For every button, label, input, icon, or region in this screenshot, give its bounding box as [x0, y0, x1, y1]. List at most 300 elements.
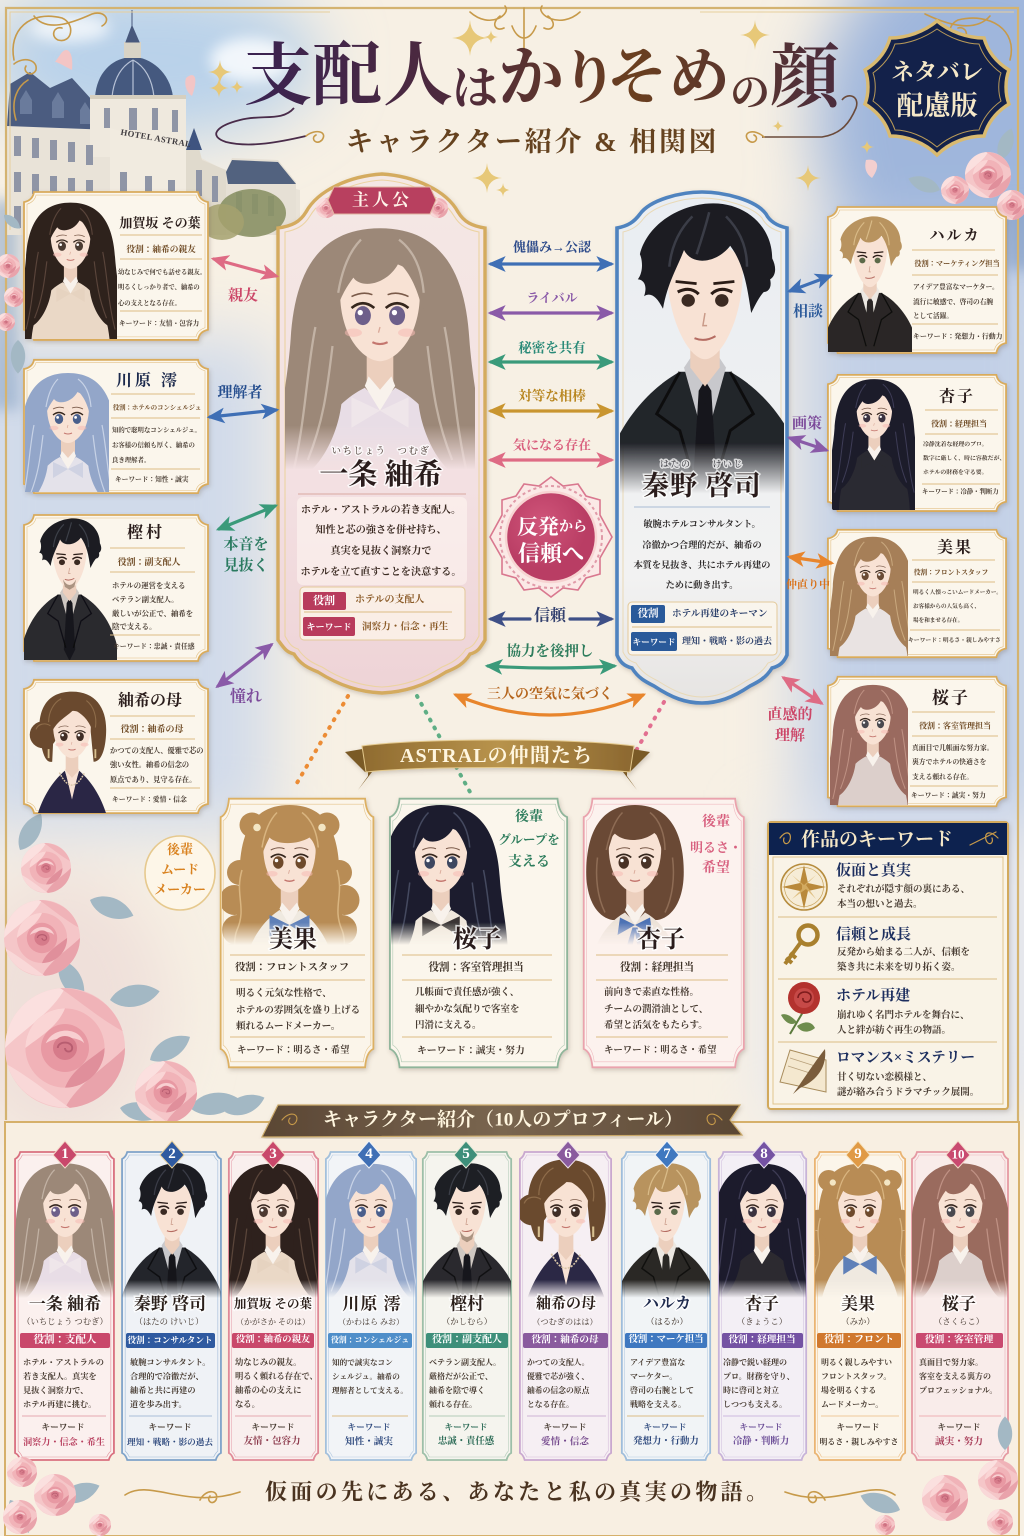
portrait [586, 805, 684, 944]
subtitle: キャラクター紹介 & 相関図 [346, 127, 719, 157]
hero name: 秦野 啓司 [642, 471, 762, 501]
role: 役割：経理担当 [620, 960, 694, 974]
keywords: キーワード [740, 1422, 782, 1432]
description: アイデア豊富なマーケター。 [913, 282, 999, 290]
number badge [946, 1141, 970, 1168]
icon: rose [781, 982, 820, 1034]
description: 場を和ませる存在。 [913, 616, 963, 624]
relation arrow: 仲直り中: 仲直り中 [786, 577, 830, 591]
profile card 7: ハルカ [620, 1140, 712, 1461]
number badge: 3 [269, 1146, 277, 1162]
role: 役割：フロントスタッフ [235, 960, 349, 974]
panel: profile section background [5, 1122, 1019, 1536]
keywords: キーワード [938, 1422, 980, 1432]
portrait [23, 518, 117, 664]
dotted connector: green [417, 696, 470, 792]
hero description: 冷徹かつ合理的だが、紬希の [642, 539, 762, 550]
name: ハルカ [643, 1296, 691, 1312]
reading: （つむぎのはは） [532, 1318, 598, 1326]
name: 美果 [937, 538, 973, 556]
portrait [912, 1163, 1008, 1297]
side note: 支える [508, 852, 550, 870]
reading: （さくらこ） [934, 1318, 984, 1326]
center arrow: 対等な相棒 [491, 388, 611, 411]
number badge [53, 1141, 77, 1168]
reading: （かがさか そのは） [236, 1318, 310, 1326]
rose garden: bottom left [3, 1457, 111, 1536]
heroine portrait [285, 228, 475, 466]
keywords: キーワード [149, 1422, 191, 1432]
name: 加賀坂 その葉 [234, 1296, 313, 1311]
description: 冷静で鋭い経理の [723, 1356, 787, 1366]
portrait [122, 1163, 221, 1298]
role: 役割：経理担当 [931, 418, 987, 428]
panel: hero [614, 190, 792, 708]
number badge: 10 [952, 1146, 964, 1162]
keywords [23, 1422, 105, 1447]
keywords: 明るさ・親しみやすさ [820, 1436, 898, 1446]
hotel building illustration [7, 10, 300, 240]
keywords: キーワード：友情・包容力 [119, 318, 200, 328]
staff card: 美果 [218, 799, 373, 1067]
keywords [633, 1422, 699, 1447]
description: 合理的で冷徹だが、 [130, 1370, 204, 1380]
keyword panel heading: 作品のキーワード [801, 828, 953, 850]
keywords: キーワード：知性・誠実 [115, 474, 189, 484]
heroine name: いちじょう つむぎ [331, 446, 431, 457]
icon: key [785, 926, 818, 964]
role: 役割：紬希の母 [120, 723, 184, 734]
text: 仮面と真実: 仮面と真実 [836, 861, 911, 879]
role: 役割：フロントスタッフ [914, 568, 988, 576]
rose garden: lower left [4, 809, 268, 1124]
hero role and keywords: キーワード [633, 637, 675, 647]
heroine description: ホテルを立て直すことを決意する。 [300, 564, 462, 578]
description: 道を歩み出す。 [130, 1398, 187, 1408]
keywords [935, 1422, 983, 1448]
description: しつつも支える。 [723, 1398, 787, 1408]
relation arrow: 直感的理解 [767, 678, 821, 744]
portrait [423, 1163, 511, 1297]
rose cluster: top right [906, 126, 1024, 220]
description: となる存在。 [527, 1398, 574, 1408]
number badge: 2 [168, 1146, 176, 1162]
center arrow: 気になる存在: 気になる存在 [513, 438, 591, 452]
role pill: 役割：マーケ担当 [628, 1333, 704, 1345]
relation arrow: 本音を見抜く [219, 506, 275, 574]
profile card 6: 紬希の母 [517, 1141, 612, 1460]
description: プロ。財務を守り、 [723, 1370, 795, 1380]
portrait [827, 216, 912, 356]
portrait [222, 805, 360, 944]
keywords [541, 1422, 590, 1448]
footer tagline: 仮面の先にある、あなたと私の真実の物語。 [265, 1480, 768, 1504]
keywords: 友情・包容力 [243, 1435, 301, 1447]
rose garden: bottom right [857, 1416, 1018, 1535]
banner: ASTRALの仲間たち: ASTRALの仲間たち [400, 744, 592, 767]
spoiler badge: ネタバレ [891, 60, 983, 84]
description: 紬希の心の支えに [235, 1384, 301, 1394]
medallion: 反発から信頼へ: 信頼へ [518, 540, 584, 566]
role pill [232, 1333, 314, 1348]
card: 桜子 (right) [827, 677, 1006, 823]
name: 杏子 [637, 926, 685, 953]
description: 知的で誠実なコン [332, 1356, 393, 1366]
heroine role and keywords: ホテルの支配人 [355, 592, 424, 606]
heroine role and keywords: キーワード [306, 622, 352, 632]
reading: （はたの けいじ） [134, 1318, 204, 1326]
keywords: 理知・戦略・影の過去 [127, 1436, 213, 1447]
portrait [24, 202, 117, 343]
role pill [817, 1332, 901, 1348]
name: 樫村 [127, 522, 165, 542]
description: 知的で聡明なコンシェルジュ。 [112, 424, 201, 434]
hero role and keywords: ホテル再建のキーマン [672, 608, 768, 620]
name: 紬希の母 [118, 690, 182, 710]
number badge [556, 1141, 580, 1168]
keywords [345, 1422, 393, 1448]
side note: 後輩 [702, 812, 730, 830]
keywords: キーワード：明るさ・希望 [604, 1044, 717, 1056]
keywords: 愛情・信念 [541, 1436, 590, 1448]
profile card 4: 川原 澪 [325, 1140, 417, 1461]
center arrow: 気になる存在 [491, 438, 611, 460]
heroine description: 真実を見抜く洞察力で [331, 544, 431, 556]
description: シェルジュ。紬希の [332, 1370, 400, 1380]
relation arrow: 画策: 画策 [792, 414, 822, 432]
hero role and keywords: 理知・戦略・影の過去 [682, 635, 773, 646]
description: フロントスタッフ。 [821, 1372, 891, 1380]
icon: compass [781, 864, 827, 910]
title: り [560, 46, 618, 110]
hotel sign: HOTEL ASTRAL [120, 127, 192, 149]
name: 一条 紬希 [29, 1294, 101, 1314]
medallion: 反発から信頼へ: 反発から [517, 515, 587, 539]
text: ロマンス×ミステリー [836, 1050, 979, 1098]
description: 戦略を支える。 [630, 1398, 686, 1408]
number badge [261, 1141, 285, 1168]
role: 役割：客室管理担当 [919, 720, 991, 730]
banner: キャラクター紹介: キャラクター紹介（10人のプロフィール） [323, 1108, 683, 1130]
heroine description: 知性と芯の強さを併せ持ち、 [315, 522, 447, 536]
center arrow: 秘密を共有 [491, 340, 611, 362]
reading: （きょうこ） [737, 1318, 787, 1326]
description: 紬希を陰で導く [429, 1384, 485, 1394]
role pill: 役割：紬希の母 [531, 1334, 599, 1346]
description: 心の支えとなる存在。 [118, 298, 181, 306]
keywords: 発想力・行動力 [633, 1435, 699, 1447]
relation arrow: 理解者: 理解者 [217, 383, 263, 401]
name: 加賀坂 その葉 [119, 216, 201, 230]
callout: 後輩ムードメーカー [145, 836, 215, 910]
relation arrow: 本音を見抜く: 見抜く [223, 556, 269, 574]
footer flourish left [125, 1490, 240, 1503]
keywords [820, 1422, 898, 1446]
title: 配 [312, 38, 382, 114]
role pill [722, 1333, 803, 1348]
description: ホテル再建に挑む。 [23, 1398, 96, 1408]
relation arrow: 画策 [790, 414, 826, 450]
description: かつての支配人、優雅で芯の [110, 746, 203, 755]
text: 仮面と真実: それぞれが隠す顔の裏にある、 [837, 883, 970, 895]
center arrow: ライバル [491, 290, 611, 313]
keywords: キーワード [42, 1422, 84, 1432]
title [216, 38, 857, 144]
description: チームの潤滑油として、 [604, 1003, 708, 1015]
portrait [719, 1164, 806, 1297]
text: ホテル再建: ホテル再建 [836, 986, 910, 1004]
hero name: はたの けいじ [660, 459, 744, 469]
portrait [830, 536, 908, 660]
card: 加賀坂 その葉 [20, 192, 208, 356]
title: は [452, 62, 498, 114]
side note: グループを [498, 832, 560, 847]
number badge: 6 [564, 1146, 572, 1162]
description: 見抜く洞察力で、 [23, 1384, 88, 1394]
description: ホテルの雰囲気を盛り上げる [236, 1004, 360, 1016]
description: 冷静沈着な経理のプロ。 [923, 440, 988, 448]
description: ムードメーカー。 [821, 1400, 883, 1408]
card: 樫村 [18, 515, 208, 672]
profile card 2: 秦野 啓司 [121, 1140, 222, 1461]
description: 厳しいが公正で、紬希を [112, 608, 193, 618]
name: 秦野 啓司 [134, 1294, 206, 1314]
heroine name: 一条 紬希 [319, 458, 443, 491]
heroine description: ホテル・アストラルの若き支配人。 [301, 502, 461, 516]
heroine role tag: 主人公 [352, 190, 412, 210]
keywords: キーワード：明るさ・希望 [237, 1044, 350, 1056]
portrait [815, 1164, 905, 1296]
name: 杏子 [939, 386, 975, 406]
role pill [328, 1333, 412, 1348]
keywords: 洞察力・信念・希生 [23, 1436, 105, 1447]
title: そ [606, 44, 668, 112]
description: ベテラン副支配人。 [429, 1356, 501, 1366]
keywords: キーワード [348, 1422, 390, 1432]
profile card 1: 一条 紬希 [14, 1140, 115, 1461]
keywords: キーワード：忠誠・責任感 [113, 642, 196, 650]
role pill: 役割：副支配人 [432, 1332, 502, 1346]
callout: 後輩ムードメーカー: 後輩 [167, 842, 193, 856]
card: 紬希の母 [24, 680, 208, 841]
description: 優雅で芯が強く、 [527, 1370, 589, 1380]
number badge: 4 [365, 1146, 373, 1162]
portrait [15, 1164, 114, 1297]
number badge: 5 [462, 1146, 470, 1162]
dotted connector: orange [294, 696, 348, 788]
keywords: 忠誠・責任感 [438, 1435, 495, 1447]
role pill: 役割：経理担当 [728, 1334, 796, 1346]
name: 紬希の母 [536, 1294, 596, 1312]
relation arrow: 本音を見抜く: 本音を [223, 535, 269, 553]
text: ホテル再建: 人と絆が紡ぐ再生の物語。 [837, 1024, 951, 1036]
reading: （はるか） [646, 1318, 688, 1326]
keywords: キーワード：明るさ・親しみやすさ [908, 636, 1001, 644]
portrait [622, 1163, 710, 1297]
center arrow: ライバル: ライバル [526, 290, 578, 306]
dotted connector: pink [625, 702, 664, 770]
title: か [498, 42, 564, 114]
role pill [916, 1332, 1003, 1348]
description: 時に啓司と対立 [723, 1384, 779, 1394]
description: 良き理解者。 [112, 454, 150, 464]
description: ホテルの運営を支える [112, 580, 186, 590]
spoiler badge: 配慮版 [896, 90, 978, 121]
name: ハルカ [929, 227, 981, 244]
hero role and keywords [628, 602, 777, 655]
icon: book and quill [780, 1049, 826, 1094]
role pill [523, 1333, 608, 1348]
center arrow: 協力を後押し [488, 642, 614, 668]
description: 前向きで素直な性格。 [604, 986, 699, 998]
center arrow: 秘密を共有: 秘密を共有 [518, 340, 586, 356]
text: ロマンス×ミステリー: 謎が絡み合うドラマチック展開。 [837, 1086, 979, 1098]
role: 役割：客室管理担当 [428, 960, 524, 974]
keywords: 知性・誠実 [345, 1436, 393, 1448]
description: 明るく親しみやすい [821, 1356, 892, 1366]
number badge [160, 1141, 184, 1168]
role: 役割：マーケティング担当 [914, 259, 1000, 268]
profile card 3: 加賀坂 その葉 [228, 1140, 319, 1461]
description: 支える頼れる存在。 [912, 772, 973, 780]
banner: キャラクター紹介 [262, 1105, 742, 1137]
description: プロフェッショナル。 [919, 1386, 997, 1394]
description: マーケター。 [630, 1372, 677, 1380]
staff card: 杏子 [584, 799, 744, 1067]
keywords: キーワード [644, 1422, 686, 1432]
description: 場を明るくする [821, 1384, 876, 1394]
description: 紬希と共に再建の [130, 1384, 196, 1394]
keyword panel heading [769, 823, 1007, 855]
number badge: 7 [663, 1146, 671, 1162]
description: 明るく元気な性格で、 [236, 986, 332, 998]
description: 流行に敏感で、啓司の右腕 [913, 296, 993, 306]
text: 仮面と真実 [836, 861, 970, 910]
center arrow: 三人の空気に気づく [456, 686, 643, 715]
description: 理解者として支える。 [332, 1384, 408, 1394]
description: 幼なじみの親友。 [235, 1356, 301, 1366]
relation arrow: 理解者 [210, 383, 276, 417]
profile card 5: 樫村 [422, 1140, 512, 1461]
side note: 希望 [702, 858, 730, 876]
description: 厳格だが公正で、 [429, 1370, 493, 1380]
heroine role tag [316, 187, 448, 218]
panel: work keywords [768, 822, 1008, 1109]
description: 敏腕コンサルタント。 [130, 1356, 210, 1366]
description: 数字に厳しく、時に容赦だが、 [923, 454, 1005, 462]
keywords: キーワード [252, 1422, 294, 1432]
description: 紬希の信念の原点 [527, 1384, 591, 1394]
number badge [655, 1141, 679, 1168]
callout: 後輩ムードメーカー: メーカー [154, 882, 206, 896]
text: ホテル再建: 崩れゆく名門ホテルを舞台に、 [837, 1009, 970, 1021]
keywords: キーワード：愛情・信念 [112, 794, 188, 804]
spoiler badge [865, 21, 1009, 155]
text: ロマンス×ミステリー: 甘く切ない恋模様と、 [837, 1071, 932, 1083]
hero portrait [620, 203, 784, 492]
description: 円滑に支える。 [415, 1019, 482, 1031]
card: 杏子 (right) [828, 375, 1006, 516]
description: 几帳面で責任感が強く、 [415, 986, 519, 998]
center arrow: 信頼 [491, 606, 611, 624]
hero description: ために動き出す。 [666, 579, 738, 590]
name: 樫村 [450, 1294, 484, 1314]
heroine description [297, 497, 467, 585]
card: 川原 澪 [14, 360, 208, 535]
description: 原点であり、見守る存在。 [110, 775, 196, 784]
staff card: 桜子 [374, 799, 567, 1067]
text: 信頼と成長: 築き共に未来を切り拓く姿。 [837, 961, 961, 973]
number badge [752, 1141, 776, 1168]
relation arrow: 直感的理解: 理解 [775, 727, 805, 744]
hero description: 本質を見抜き、共にホテル再建の [634, 559, 770, 570]
portrait [30, 692, 106, 813]
role pill [20, 1332, 110, 1348]
keywords [733, 1422, 789, 1447]
name: 川原 澪 [342, 1294, 402, 1314]
medallion: 反発から信頼へ [490, 477, 612, 597]
center arrow: 信頼: 信頼 [534, 606, 567, 624]
center arrow: 公認 [491, 240, 611, 264]
description: 頼れる存在。 [429, 1398, 477, 1408]
title: 支 [244, 38, 312, 114]
keywords: 誠実・努力 [935, 1436, 983, 1448]
description: なる。 [235, 1400, 260, 1408]
card: ハルカ [819, 207, 1006, 371]
relation arrow: 直感的理解: 直感的 [767, 705, 813, 723]
portrait [24, 373, 109, 496]
hero role and keywords: 役割 [638, 606, 659, 620]
text: ロマンス×ミステリー: ロマンス×ミステリー [836, 1050, 975, 1066]
keywords: キーワード [544, 1422, 586, 1432]
role pill: 役割：紬希の親友 [236, 1333, 311, 1345]
description: ホテル・アストラルの [23, 1358, 104, 1366]
hero description: 敏腕ホテルコンサルタント。 [643, 518, 761, 529]
name: 桜子 [453, 926, 501, 953]
keywords: キーワード [837, 1422, 879, 1432]
footer flourish right [785, 1490, 895, 1503]
keywords: キーワード：発想力・行動力 [913, 332, 1003, 340]
keywords [127, 1422, 213, 1447]
card: 美果 (right) [827, 530, 1006, 675]
keywords: 冷静・判断力 [733, 1435, 789, 1447]
number badge [846, 1141, 870, 1168]
description: かつての支配人。 [527, 1356, 589, 1366]
role: 役割：副支配人 [117, 556, 181, 567]
keywords [438, 1422, 495, 1447]
banner: ASTRALの仲間たち [345, 740, 650, 790]
center arrow: 三人の空気に気づく: 三人の空気に気づく [487, 686, 613, 702]
relation arrow: 相談 [790, 276, 830, 320]
number badge: 9 [854, 1146, 862, 1162]
description: 真面目で几帳面な努力家。 [912, 742, 994, 752]
portrait [832, 379, 915, 514]
description: ベテラン副支配人。 [112, 594, 179, 604]
portrait [229, 1164, 318, 1297]
role: 役割：紬希の親友 [126, 243, 196, 254]
description: として活躍。 [913, 310, 953, 320]
role pill [426, 1332, 508, 1348]
description: 強い女性。紬希の信念の [110, 760, 189, 769]
text: ホテル再建 [836, 986, 970, 1036]
profile card 10: 桜子 [911, 1140, 1009, 1461]
portrait [391, 805, 508, 944]
role pill [126, 1333, 215, 1348]
side note: 明るさ・ [690, 840, 742, 854]
portrait [520, 1160, 606, 1297]
profile card 9: 美果 [814, 1140, 906, 1461]
role: 役割：ホテルのコンシェルジュ [113, 402, 201, 412]
